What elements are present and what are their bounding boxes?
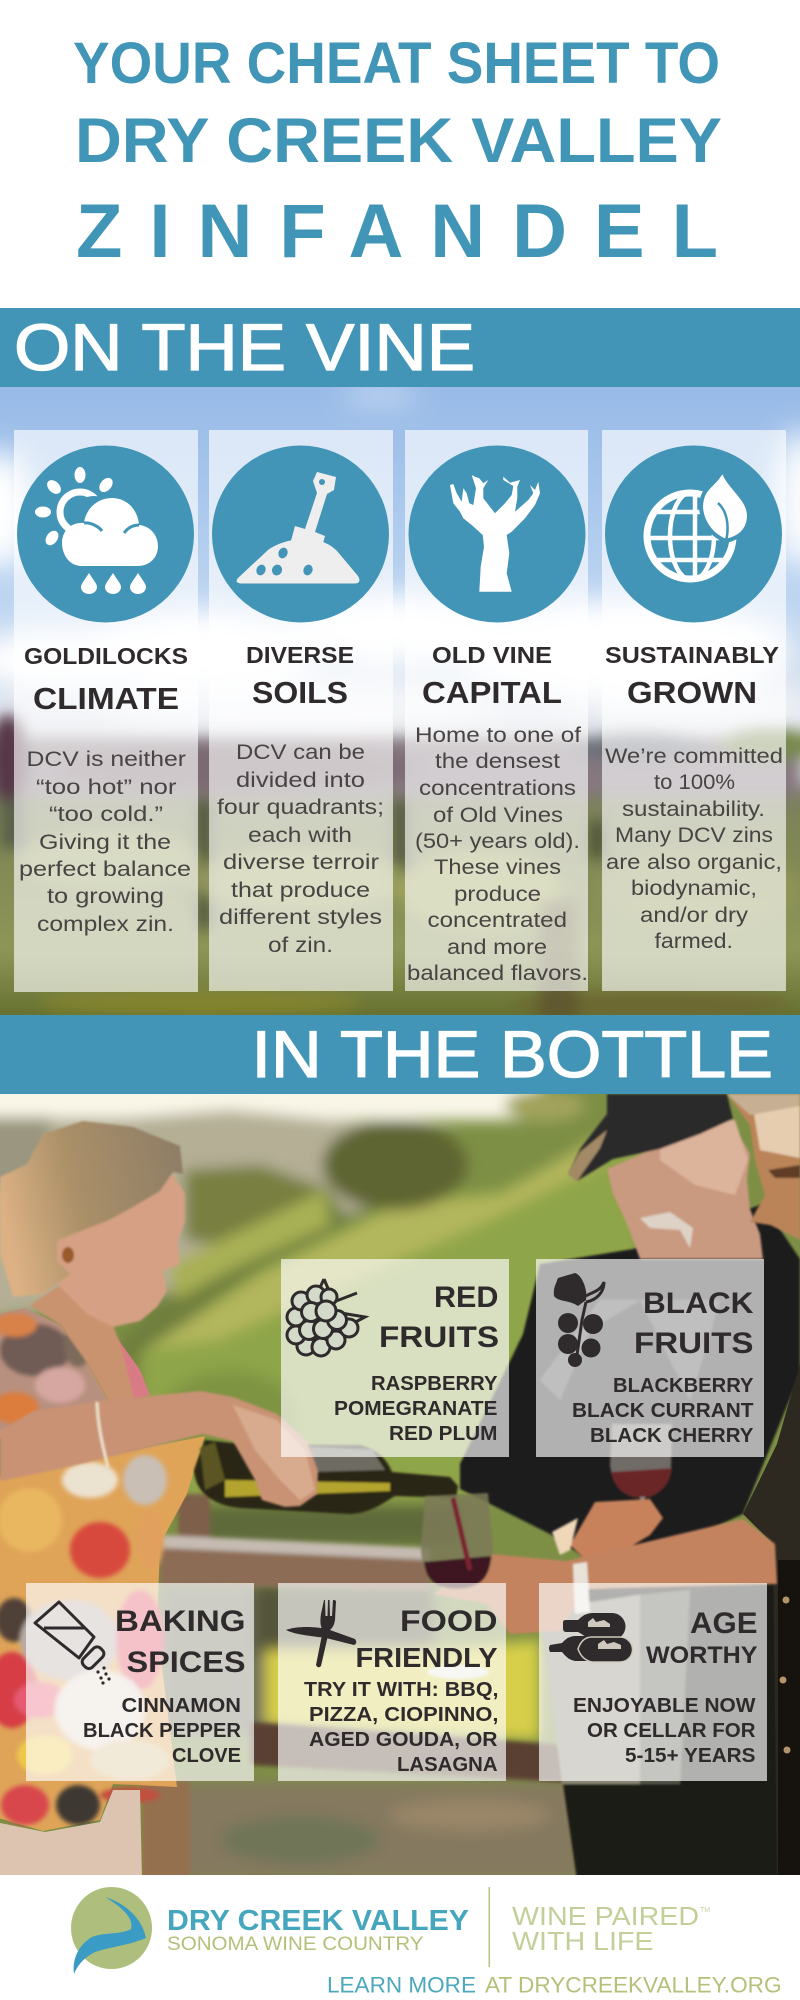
panel: diverse soils — [209, 430, 393, 991]
photo: woman's arm and hand — [0, 1391, 318, 1507]
panel: goldilocks climate — [14, 430, 198, 992]
panel: old vine capital — [405, 430, 588, 991]
text: sustainability description: to 100% — [654, 771, 735, 794]
heading: goldilocks climate: CLIMATE — [33, 681, 179, 716]
text: sustainability description: farmed. — [654, 930, 733, 953]
text: spice list: CINNAMON — [122, 1695, 241, 1717]
heading: goldilocks climate: GOLDILOCKS — [24, 643, 188, 669]
text: climate description: to growing — [47, 885, 164, 908]
icon: salt shaker — [35, 1602, 111, 1685]
text: climate description — [19, 748, 191, 936]
heading: age worthy: AGE — [690, 1607, 758, 1640]
text: soils description: each with — [248, 824, 352, 847]
text: sustainability description: Many DCV zins — [615, 824, 773, 847]
text: climate description: Giving it the — [39, 831, 171, 854]
text: soils description: that produce — [231, 879, 370, 902]
text: old vine description: These vines — [434, 856, 561, 879]
heading: red fruits: RED — [434, 1281, 498, 1314]
text: soils description: of zin. — [268, 934, 333, 957]
heading: red fruits: FRUITS — [379, 1321, 499, 1354]
text: black fruit list: BLACK CHERRY — [590, 1425, 754, 1447]
photo: second man's shirt — [743, 1364, 800, 1880]
section banner: in the bottle — [0, 1015, 800, 1094]
section banner: on the vine: ON THE VINE — [14, 310, 475, 384]
heading: diverse soils: SOILS — [252, 675, 348, 710]
icon: globe with leaf — [605, 446, 782, 622]
text: spice list: BLACK PEPPER — [83, 1720, 242, 1742]
text: soils description: DCV can be — [236, 741, 365, 764]
text: food pairings: TRY IT WITH: BBQ, — [304, 1679, 498, 1701]
card: food friendly — [278, 1583, 506, 1781]
text: old vine description: of Old Vines — [433, 804, 563, 827]
text: black fruit list: BLACKBERRY — [613, 1375, 754, 1397]
heading: food friendly: FRIENDLY — [356, 1642, 498, 1673]
text: aging advice: ENJOYABLE NOW — [573, 1695, 756, 1717]
text: climate description: complex zin. — [37, 913, 174, 936]
photo: vineyard under cloudy sky — [0, 387, 800, 1035]
heading: age worthy: WORTHY — [646, 1642, 758, 1669]
footer — [0, 1875, 800, 2000]
logo text: dry creek valley: DRY CREEK VALLEY — [167, 1905, 469, 1937]
title: DRY CREEK VALLEY — [75, 106, 722, 176]
card: baking spices — [26, 1583, 254, 1781]
icon: raspberry — [287, 1279, 365, 1356]
text: climate description: “too hot” nor — [36, 776, 176, 799]
heading: sustainably grown: SUSTAINABLY — [605, 642, 779, 668]
text: red fruit list: POMEGRANATE — [334, 1398, 498, 1420]
text: climate description: perfect balance — [19, 858, 191, 881]
photo: woman's neck and hair — [0, 1121, 185, 1405]
tagline: wine paired with life: WINE PAIRED — [512, 1901, 699, 1931]
heading: black fruits: FRUITS — [634, 1327, 754, 1360]
text: food pairings: LASAGNA — [397, 1754, 498, 1776]
heading: old vine capital — [422, 642, 562, 710]
logo text: dry creek valley — [167, 1905, 469, 1955]
card: black fruits — [536, 1259, 764, 1457]
text: soils description — [217, 741, 384, 957]
text: aging advice: OR CELLAR FOR — [587, 1720, 756, 1742]
link: learn more — [327, 1972, 782, 1998]
heading: black fruits — [634, 1287, 754, 1360]
heading: red fruits — [379, 1281, 499, 1354]
icon: stacked bottles — [549, 1613, 632, 1662]
text: old vine description: the densest — [435, 750, 560, 773]
photo: man's black shirt — [460, 1204, 800, 1880]
text: aging advice: 5-15+ YEARS — [625, 1745, 756, 1767]
link: learn more: LEARN MORE — [327, 1972, 476, 1998]
section banner: on the vine — [0, 308, 800, 387]
text: soils description: different styles — [219, 906, 382, 929]
heading: sustainably grown — [605, 642, 779, 710]
heading: baking spices: SPICES — [126, 1646, 246, 1679]
text: sustainability description: and/or dry — [640, 904, 749, 927]
icon: fork and knife — [286, 1600, 356, 1667]
heading: diverse soils — [246, 642, 354, 710]
heading: old vine capital: CAPITAL — [422, 675, 562, 710]
text: food pairings — [304, 1679, 498, 1776]
photo: woman's trousers — [0, 1790, 142, 1880]
text: sustainability description: We’re committed — [605, 745, 783, 768]
title: YOUR CHEAT SHEET TO — [73, 31, 720, 96]
text: soils description: divided into — [236, 769, 365, 792]
text: climate description: “too cold.” — [49, 803, 163, 826]
link: learn more: AT DRYCREEKVALLEY.ORG — [485, 1972, 782, 1998]
card: age worthy — [539, 1583, 767, 1781]
photo: wooden fence — [142, 1494, 565, 1881]
text: red fruit list: RED PLUM — [389, 1423, 498, 1445]
text: red fruit list: RASPBERRY — [371, 1373, 498, 1395]
tagline: wine paired with life: WITH LIFE — [512, 1926, 654, 1956]
heading: food friendly — [356, 1605, 498, 1673]
text: old vine description: (50+ years old). — [415, 830, 580, 853]
heading: baking spices: BAKING — [115, 1605, 246, 1638]
text: black fruit list — [572, 1375, 754, 1447]
text: sustainability description: biodynamic, — [631, 877, 757, 900]
text: sustainability description — [605, 745, 783, 953]
text: old vine description: Home to one of — [415, 724, 581, 747]
text: climate description: DCV is neither — [26, 748, 186, 771]
text: red fruit list — [334, 1373, 498, 1445]
photo: man in cap — [568, 1094, 763, 1259]
icon: black currant — [554, 1273, 604, 1367]
heading: age worthy — [646, 1607, 758, 1669]
panel: sustainably grown — [602, 430, 786, 991]
heading: old vine capital: OLD VINE — [432, 642, 552, 668]
icon: sun, cloud and rain — [17, 446, 194, 622]
text: food pairings: PIZZA, CIOPINNO, — [309, 1704, 498, 1726]
text: old vine description: balanced flavors. — [407, 962, 588, 985]
photo: second man's head — [727, 1094, 800, 1240]
heading: sustainably grown: GROWN — [627, 675, 757, 710]
text: old vine description: and more — [447, 936, 547, 959]
photo background: sky, hills, fence and meadow — [0, 1080, 640, 1881]
text: spice list — [83, 1695, 242, 1767]
photo: wine glasses and hands — [421, 1424, 777, 1679]
text: sustainability description: sustainability. — [622, 798, 765, 821]
text: old vine description: produce — [454, 883, 541, 906]
tagline: wine paired with life: TM — [700, 1907, 710, 1914]
photo: people pouring wine in the vineyard — [0, 1080, 800, 1881]
logo: dry creek valley emblem — [71, 1887, 152, 1974]
title — [73, 31, 722, 274]
text: soils description: diverse terroir — [223, 851, 379, 874]
text: food pairings: AGED GOUDA, OR — [309, 1729, 498, 1751]
heading: baking spices — [115, 1605, 246, 1679]
icon: shovel in soil — [212, 446, 389, 622]
section banner: in the bottle: IN THE BOTTLE — [252, 1017, 773, 1091]
text: black fruit list: BLACK CURRANT — [572, 1400, 754, 1422]
photo: woman's blouse — [0, 1308, 205, 1831]
text: old vine description: concentrated — [428, 909, 567, 932]
text: spice list: CLOVE — [172, 1745, 241, 1767]
title: ZINFANDEL — [76, 189, 718, 274]
text: soils description: four quadrants; — [217, 796, 384, 819]
text: old vine description — [407, 724, 588, 985]
photo: wine bottle — [194, 1440, 458, 1514]
heading: diverse soils: DIVERSE — [246, 642, 354, 668]
logo text: dry creek valley: SONOMA WINE COUNTRY — [167, 1934, 424, 1955]
card: red fruits — [281, 1259, 509, 1457]
heading: black fruits: BLACK — [643, 1287, 754, 1320]
heading: food friendly: FOOD — [400, 1605, 498, 1638]
text: aging advice — [573, 1695, 756, 1767]
tagline: wine paired with life — [512, 1901, 710, 1956]
text: sustainability description: are also organic, — [606, 851, 782, 874]
icon: old vine silhouette — [408, 446, 586, 622]
text: old vine description: concentrations — [419, 777, 576, 800]
heading: goldilocks climate — [24, 643, 188, 716]
